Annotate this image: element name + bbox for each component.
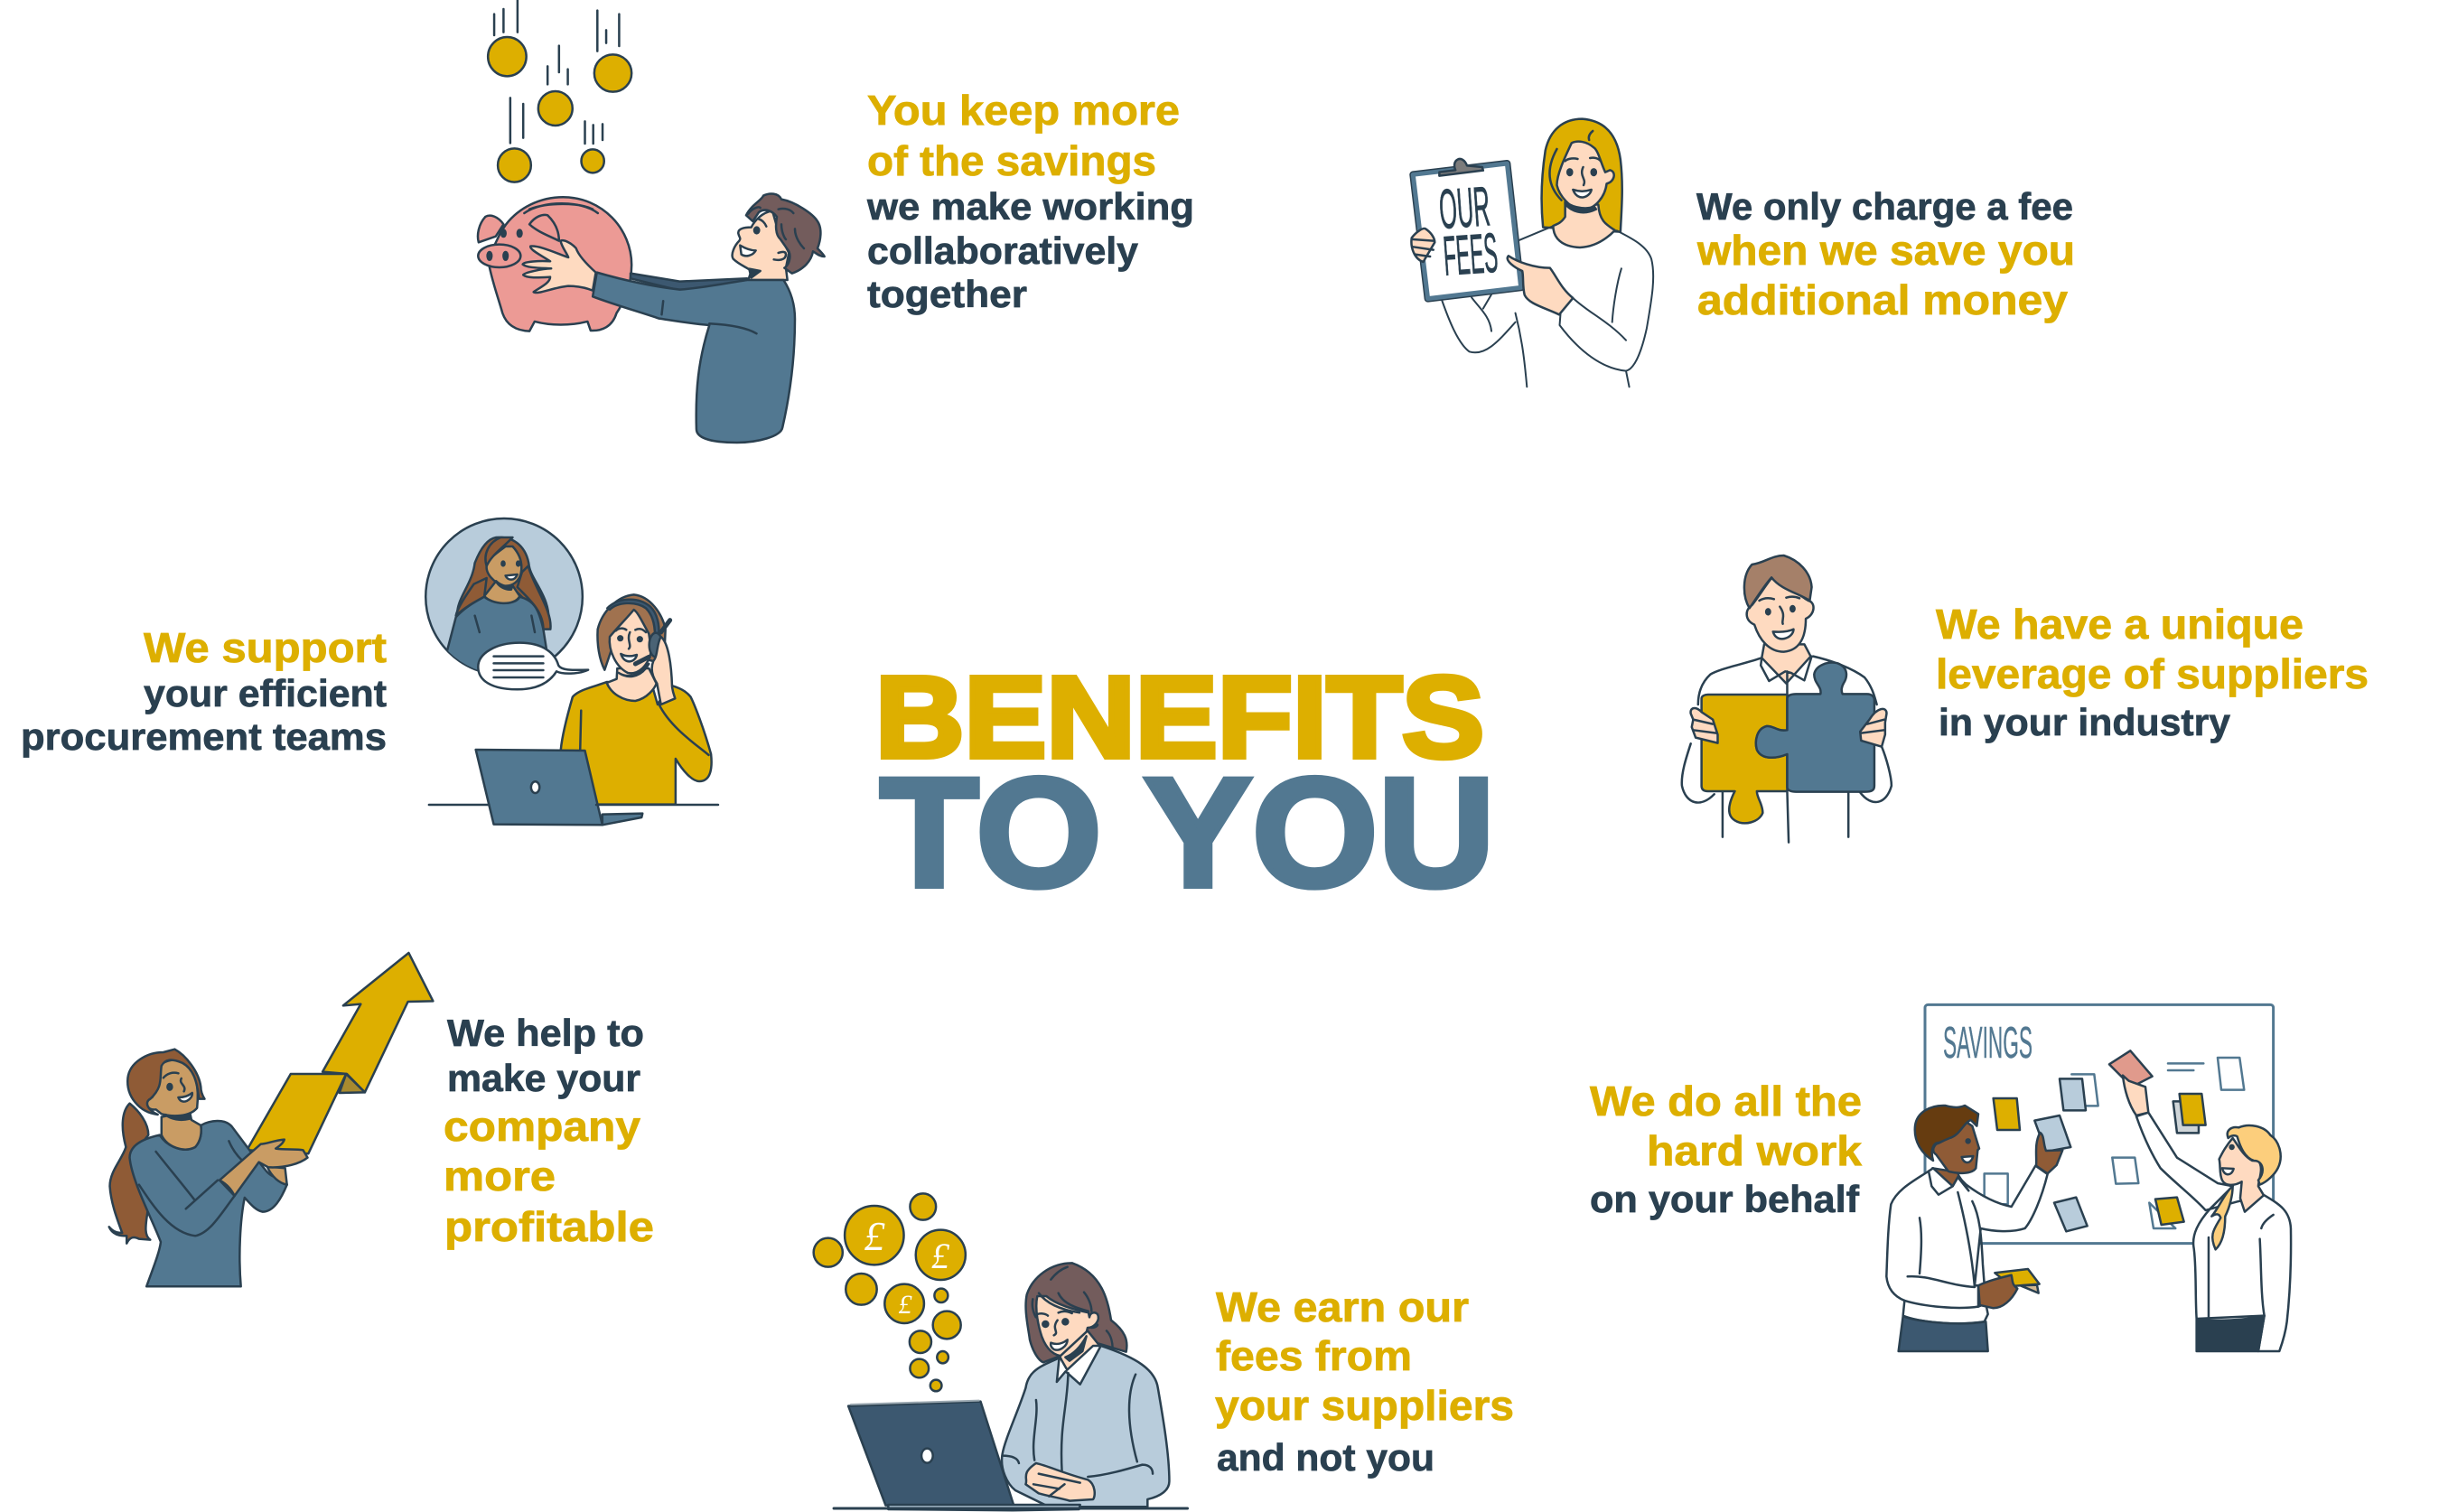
text: we help to [444, 1012, 654, 1250]
illustration: falling coins [488, 0, 631, 182]
text: you keep more of the savings: together [867, 273, 1027, 315]
panel: more profitable [109, 953, 654, 1286]
pound signs on coins: £ [898, 1290, 912, 1320]
illustration: video call with headset woman [425, 518, 718, 825]
text: you keep more of the savings [866, 87, 1194, 315]
illustration: woman holding rising arrow [109, 953, 433, 1286]
text: we do all the hard work: hard work [1647, 1127, 1862, 1174]
illustration: piggy bank held by man [478, 194, 825, 443]
text: we support: We support [144, 624, 387, 671]
text: we help to: company [444, 1103, 640, 1150]
title: benefits to you: TO YOU [880, 746, 1495, 919]
illustration: two people at savings board: SAVINGS [1943, 1019, 2032, 1068]
illustration: woman with our fees clipboard: OUR [1437, 175, 1492, 241]
text: we support: procurement teams [21, 715, 387, 758]
panel: keep more of the savings [478, 0, 1194, 443]
illustration: man joining puzzle pieces [1682, 555, 1892, 843]
panel: leverage of suppliers [1682, 555, 2369, 843]
pound signs on coins: £ [864, 1213, 885, 1259]
text: unique leverage: in your industry [1939, 701, 2231, 743]
illustration: two people at savings board [1886, 1004, 2291, 1351]
text: we help to: make your [447, 1057, 640, 1099]
text: you keep more of the savings: we make working [866, 185, 1194, 228]
text: we only charge a fee: We only charge a fee [1696, 185, 2073, 228]
text: we earn our fees: and not you [1217, 1436, 1434, 1479]
text: we earn our fees [1215, 1283, 1514, 1479]
text: we earn our fees: fees from [1216, 1332, 1412, 1379]
text: unique leverage [1936, 601, 2369, 743]
text: we help to: profitable [444, 1203, 654, 1250]
text: we help to: more [444, 1153, 556, 1199]
text: we help to: We help to [447, 1012, 644, 1054]
title: benefits to you: BENEFITS [875, 653, 1484, 782]
panel: support procurement teams [21, 518, 718, 825]
pound signs on coins [864, 1213, 950, 1320]
text: we do all the hard work: We do all the [1590, 1078, 1862, 1125]
text: you keep more of the savings: collaboratively [867, 229, 1139, 272]
text: you keep more of the savings: You keep more [867, 87, 1180, 134]
pound signs on coins: £ [931, 1236, 950, 1276]
text: we support [21, 624, 387, 758]
text: we earn our fees: your suppliers [1215, 1382, 1514, 1429]
illustration: woman with our fees clipboard: FEES [1442, 222, 1500, 288]
text: we earn our fees: We earn our [1216, 1283, 1469, 1330]
title: benefits to you [875, 653, 1495, 919]
text: we do all the hard work: on your behalf [1590, 1178, 1860, 1220]
text: you keep more of the savings: of the savings [867, 137, 1156, 184]
text: we only charge a fee: additional money [1697, 276, 2068, 323]
panel: earn fees from suppliers [814, 1193, 1514, 1510]
clipboard text [1437, 175, 1500, 288]
text: we only charge a fee [1696, 185, 2075, 323]
text: unique leverage: We have a unique [1936, 601, 2304, 648]
text: we only charge a fee: when we save you [1696, 227, 2075, 274]
illustration: pound coins and woman at laptop [814, 1193, 1188, 1510]
text: we support: your efficient [144, 672, 387, 714]
panel: hard work on your behalf [1590, 1004, 2291, 1351]
illustration: woman with our fees clipboard [1411, 119, 1653, 387]
text: we do all the hard work [1590, 1078, 1862, 1220]
text: unique leverage: leverage of suppliers [1936, 650, 2369, 697]
panel: only charge a fee [1411, 119, 2075, 387]
